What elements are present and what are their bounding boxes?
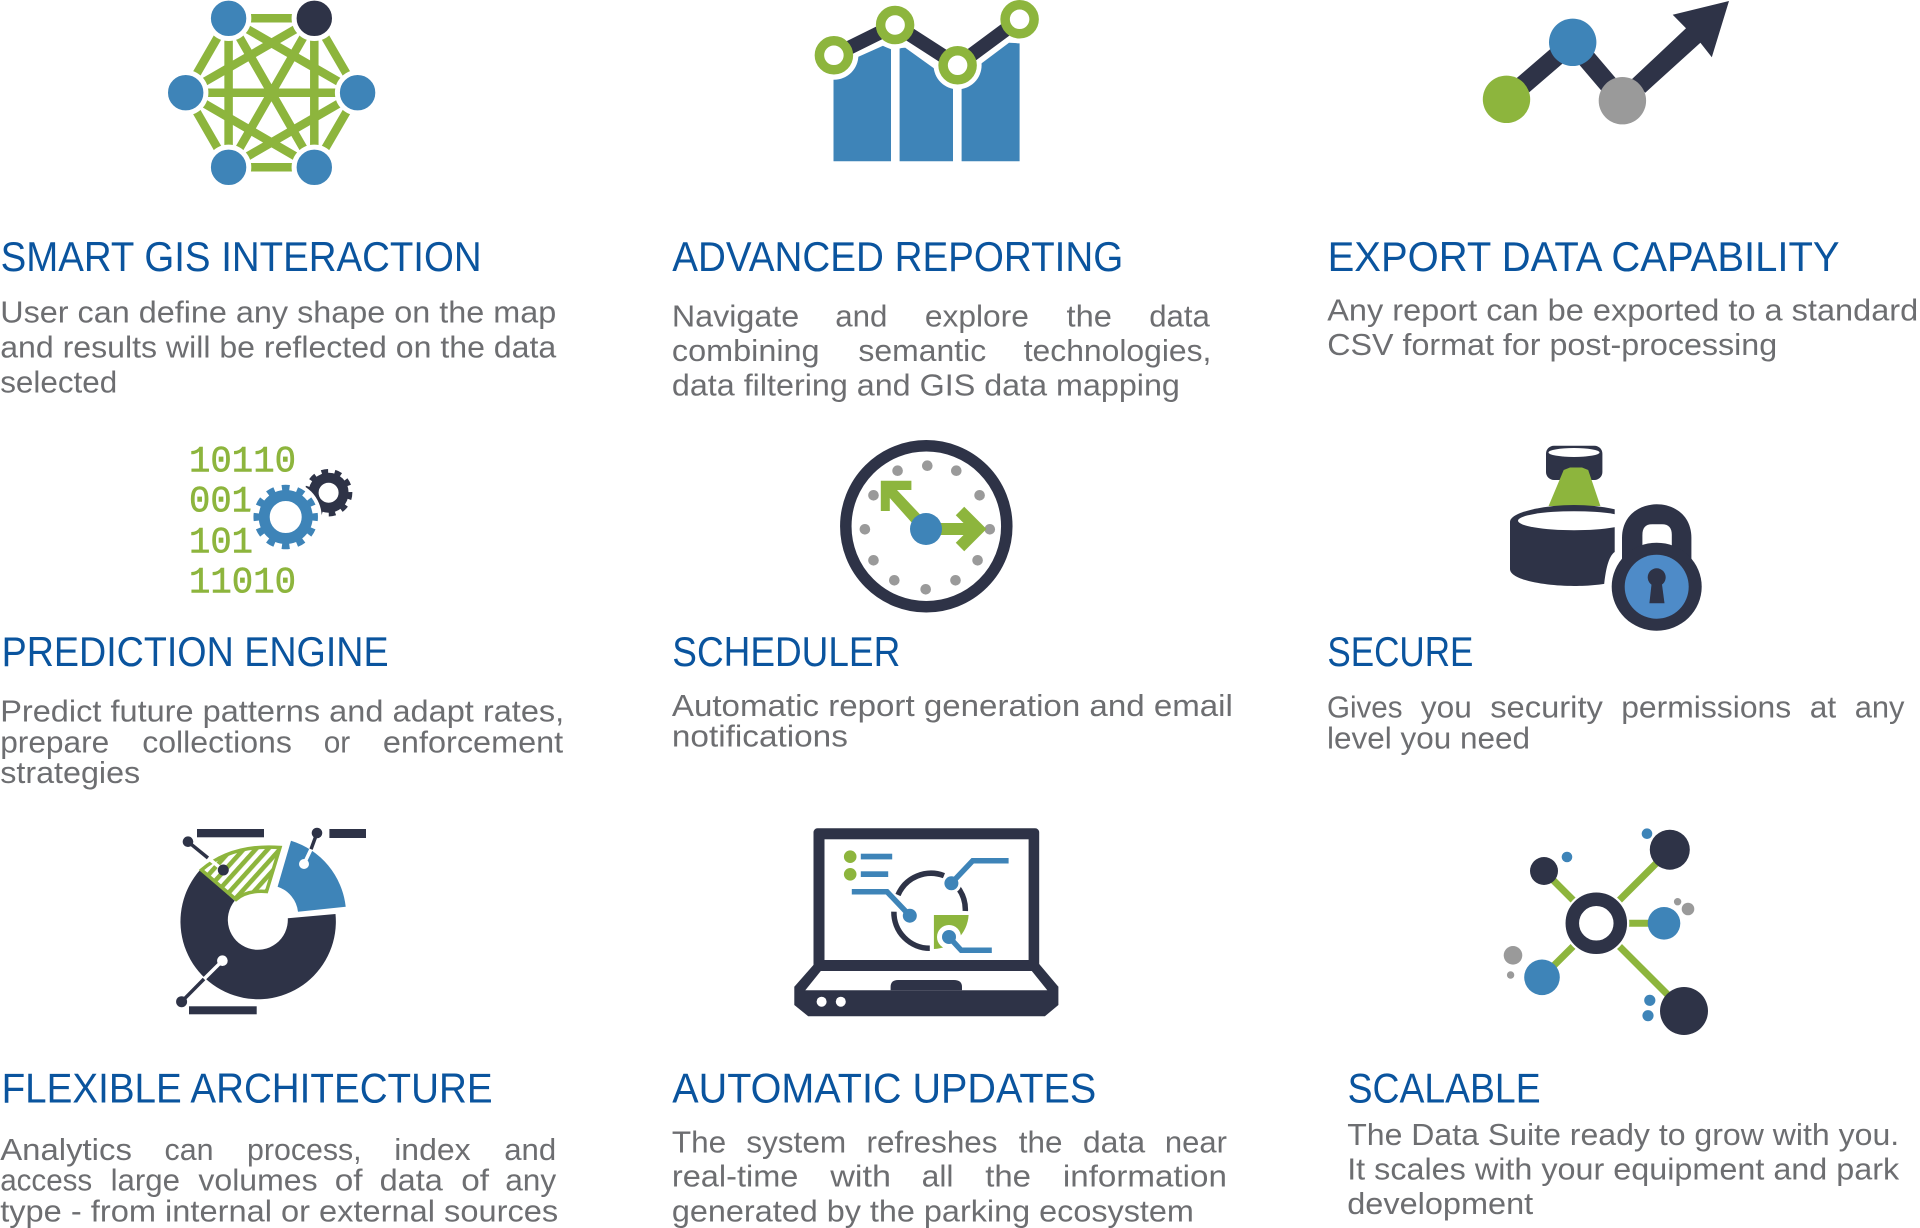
icon: clock bbox=[846, 446, 1007, 607]
text block: User can define any shape on the map bbox=[0, 295, 556, 330]
text block bbox=[1327, 293, 1918, 362]
icon: network hexagon bbox=[166, 0, 378, 187]
text block: and bbox=[504, 1132, 556, 1167]
text block: development bbox=[1347, 1186, 1534, 1221]
text block: generated by the parking ecosystem bbox=[672, 1194, 1194, 1228]
text block: information bbox=[1063, 1159, 1227, 1194]
text block: security bbox=[1490, 689, 1603, 724]
text block: with bbox=[829, 1159, 891, 1194]
icon: binary digits and gears: 101 bbox=[189, 522, 253, 564]
text block: any bbox=[505, 1163, 557, 1198]
text block: level you need bbox=[1327, 720, 1530, 755]
text block: the bbox=[985, 1159, 1031, 1194]
icon: database with padlock bbox=[1510, 446, 1702, 631]
text block: Any report can be exported to a standard bbox=[1327, 293, 1918, 328]
heading: SMART GIS INTERACTION bbox=[1, 233, 482, 280]
text block bbox=[0, 295, 557, 400]
text block: at bbox=[1810, 689, 1837, 724]
text block: refreshes bbox=[866, 1124, 997, 1159]
text block: of bbox=[335, 1163, 363, 1198]
text block: notifications bbox=[672, 719, 848, 754]
icon: laptop with dashboard bbox=[794, 828, 1058, 1016]
panel: flexible architecture bbox=[0, 828, 558, 1228]
text block: large bbox=[111, 1163, 180, 1198]
panel: automatic updates bbox=[672, 828, 1227, 1228]
text block: or bbox=[324, 724, 350, 759]
text block: index bbox=[394, 1132, 471, 1167]
panel: scalable bbox=[1347, 828, 1900, 1221]
text block: and bbox=[835, 299, 887, 334]
icon: binary digits and gears bbox=[189, 442, 350, 605]
text block: volumes bbox=[198, 1163, 318, 1198]
panel: smart GIS interaction bbox=[0, 0, 557, 400]
text block: near bbox=[1165, 1124, 1227, 1159]
text block: Gives bbox=[1327, 689, 1403, 724]
icon: donut chart with leaders bbox=[176, 828, 366, 1014]
text block: Predict future patterns and adapt rates, bbox=[0, 694, 564, 729]
panel: export data capability bbox=[1327, 1, 1918, 362]
heading: AUTOMATIC UPDATES bbox=[672, 1064, 1096, 1111]
icon: rising arrow with nodes bbox=[1483, 1, 1729, 124]
text block: the bbox=[1067, 299, 1112, 334]
text block: The bbox=[672, 1124, 726, 1159]
text block: It scales with your equipment and park bbox=[1347, 1151, 1900, 1186]
text block: type - from internal or external sources bbox=[0, 1194, 558, 1228]
text block: technologies, bbox=[1024, 333, 1211, 368]
text block: Automatic report generation and email bbox=[672, 688, 1233, 723]
heading: SECURE bbox=[1327, 628, 1473, 675]
text block: system bbox=[746, 1124, 846, 1159]
heading: SCALABLE bbox=[1348, 1064, 1541, 1111]
text block bbox=[672, 1124, 1227, 1228]
heading: FLEXIBLE ARCHITECTURE bbox=[2, 1064, 493, 1111]
icon: binary digits and gears: 11010 bbox=[189, 563, 296, 605]
icon: binary digits and gears: 10110 bbox=[189, 442, 296, 484]
text block bbox=[0, 694, 564, 790]
panel: secure bbox=[1327, 446, 1905, 755]
text block: data bbox=[1083, 1124, 1146, 1159]
icon: bars and line chart bbox=[809, 0, 1044, 161]
heading: PREDICTION ENGINE bbox=[2, 628, 389, 675]
text block: process, bbox=[247, 1132, 362, 1167]
text block: of bbox=[461, 1163, 489, 1198]
text block: and results will be reflected on the data bbox=[0, 330, 557, 365]
text block bbox=[672, 299, 1211, 403]
text block: The Data Suite ready to grow with you. bbox=[1347, 1117, 1899, 1152]
text block: enforcement bbox=[383, 724, 564, 759]
text block: real-time bbox=[672, 1159, 798, 1194]
text block: collections bbox=[142, 724, 292, 759]
text block bbox=[0, 1132, 558, 1228]
panel: advanced reporting bbox=[672, 0, 1211, 403]
text block: Navigate bbox=[672, 299, 799, 334]
heading: SCHEDULER bbox=[672, 628, 900, 675]
text block: any bbox=[1855, 689, 1905, 724]
heading: ADVANCED REPORTING bbox=[672, 233, 1123, 280]
text block: prepare bbox=[0, 724, 109, 759]
text block: can bbox=[165, 1132, 214, 1167]
text block: the bbox=[1019, 1124, 1062, 1159]
text block: access bbox=[0, 1163, 92, 1198]
text block bbox=[1347, 1117, 1900, 1221]
heading: EXPORT DATA CAPABILITY bbox=[1328, 233, 1840, 280]
icon: hub and spoke nodes bbox=[1504, 828, 1708, 1035]
panel: prediction engine bbox=[0, 442, 564, 790]
text block: permissions bbox=[1621, 689, 1791, 724]
panel: scheduler bbox=[672, 446, 1233, 754]
icon: binary digits and gears: 001 bbox=[189, 482, 253, 524]
text block: data bbox=[380, 1163, 444, 1198]
text block: all bbox=[922, 1159, 954, 1194]
text block: CSV format for post-processing bbox=[1327, 327, 1777, 362]
text block: combining bbox=[672, 333, 820, 368]
text block: semantic bbox=[858, 333, 986, 368]
text block: Analytics bbox=[0, 1132, 132, 1167]
text block: strategies bbox=[0, 755, 140, 790]
text block: data bbox=[1149, 299, 1211, 334]
text block: selected bbox=[0, 365, 117, 400]
text block bbox=[1327, 689, 1905, 755]
text block bbox=[672, 688, 1233, 754]
text block: data filtering and GIS data mapping bbox=[672, 368, 1180, 403]
text block: you bbox=[1421, 689, 1472, 724]
text block: explore bbox=[925, 299, 1029, 334]
